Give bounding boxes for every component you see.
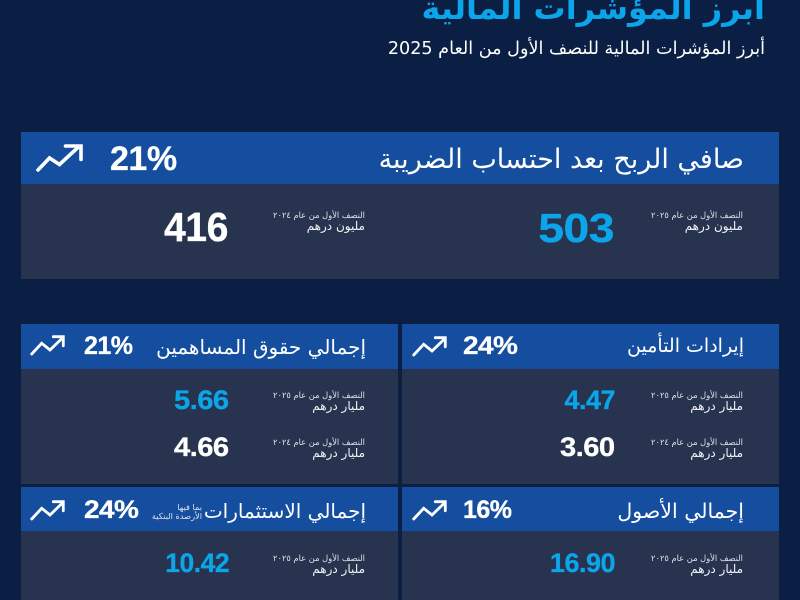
period label 2024: مليون درهم <box>307 219 365 233</box>
period label 2024: النصف الأول من عام ٢٠٢٤ <box>273 437 365 447</box>
icon: rising arrow <box>412 336 447 356</box>
panel: insurance revenue <box>402 324 779 484</box>
panel header: net profit <box>21 132 779 184</box>
period label 2024: النصف الأول من عام ٢٠٢٤ <box>651 437 743 447</box>
period label 2024 <box>273 210 365 233</box>
value 2025: 10.42 <box>165 548 229 578</box>
panel title: إجمالي الاستثمارات <box>204 499 366 523</box>
period label 2025: مليار درهم <box>690 562 743 576</box>
subtitle: أبرز المؤشرات المالية للنصف الأول من العام 2025 <box>388 39 765 59</box>
period label 2025: النصف الأول من عام ٢٠٢٥ <box>273 553 365 563</box>
icon: rising arrow <box>30 335 65 356</box>
panel: total investments <box>21 487 398 600</box>
panel title: إجمالي حقوق المساهمين <box>156 335 366 359</box>
title note: بما فيها <box>177 502 202 512</box>
period label 2024: مليار درهم <box>312 446 365 460</box>
period label 2025: مليار درهم <box>312 562 365 576</box>
panel title: صافي الربح بعد احتساب الضريبة <box>379 144 744 175</box>
period label 2025: النصف الأول من عام ٢٠٢٥ <box>273 390 365 400</box>
panel: net profit after tax <box>21 132 779 279</box>
panel header: insurance <box>402 324 779 369</box>
icon: rising arrow <box>30 500 65 520</box>
period label 2025: النصف الأول من عام ٢٠٢٥ <box>651 390 743 400</box>
panel: total assets <box>402 487 779 600</box>
value 2025: 4.47 <box>564 385 615 415</box>
panel header: investments <box>21 487 398 531</box>
change percent: 24% <box>84 496 138 524</box>
title note <box>152 502 202 522</box>
period label 2025: مليون درهم <box>685 219 743 233</box>
period label 2025: النصف الأول من عام ٢٠٢٥ <box>651 210 743 220</box>
value 2025: 16.90 <box>550 548 615 578</box>
value 2024: 4.66 <box>174 432 229 462</box>
period label 2025 <box>651 210 743 233</box>
period label 2025: مليار درهم <box>312 399 365 413</box>
value 2024: 3.60 <box>560 432 615 462</box>
period label 2025 <box>273 390 365 413</box>
change percent: 16% <box>463 496 512 524</box>
icon: rising arrow <box>412 500 447 520</box>
panel header: assets <box>402 487 779 531</box>
panel title: إجمالي الأصول <box>617 499 744 523</box>
period label 2024: النصف الأول من عام ٢٠٢٤ <box>273 210 365 220</box>
icon: rising arrow <box>36 144 83 172</box>
period label 2025 <box>651 553 743 576</box>
period label 2025 <box>651 390 743 413</box>
period label 2025 <box>273 553 365 576</box>
period label 2024 <box>651 437 743 460</box>
panel: total equity <box>21 324 398 484</box>
period label 2024: مليار درهم <box>690 446 743 460</box>
value 2025: 5.66 <box>174 385 229 415</box>
period label 2025: النصف الأول من عام ٢٠٢٥ <box>651 553 743 563</box>
period label 2025: مليار درهم <box>690 399 743 413</box>
change percent: 24% <box>463 332 517 360</box>
value 2025: 503 <box>538 205 614 251</box>
title note: الأرصدة البنكية <box>152 511 202 521</box>
change percent: 21% <box>84 332 133 360</box>
value 2024: 416 <box>164 204 228 250</box>
change percent: 21% <box>110 140 177 178</box>
period label 2024 <box>273 437 365 460</box>
panel title: إيرادات التأمين <box>627 335 744 357</box>
panel header: equity <box>21 324 398 369</box>
